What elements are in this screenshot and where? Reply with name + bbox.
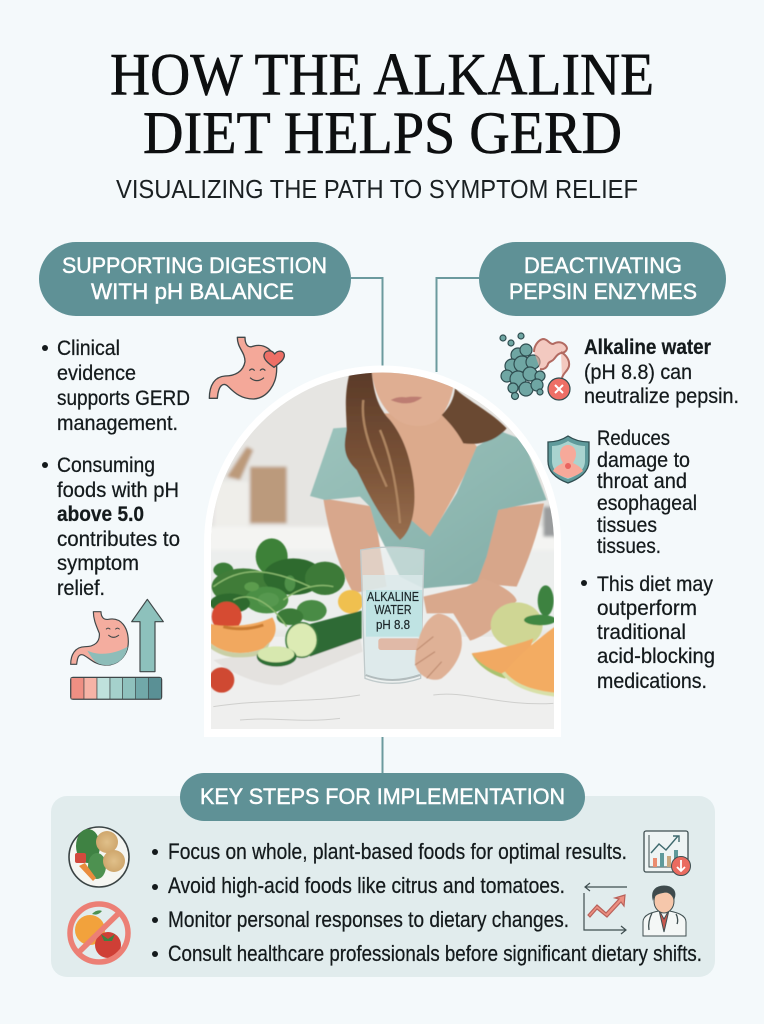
heading: deactivating pepsin — [479, 242, 726, 316]
heading: key steps: KEY STEPS FOR IMPLEMENTATION — [200, 784, 565, 809]
icon: chart with down arrow — [644, 831, 690, 876]
panel: key steps — [51, 796, 715, 977]
vegetables — [209, 538, 363, 693]
icon: stomach with pH arrow and scale — [71, 599, 163, 699]
heading: key steps — [180, 773, 585, 821]
text: alkaline water: neutralize pepsin. — [584, 384, 739, 408]
glass label text — [367, 590, 419, 632]
text: reduces damage: throat and — [597, 469, 687, 493]
left text block: above 5.0 — [57, 502, 144, 526]
glass label text: pH 8.8 — [376, 618, 410, 632]
text: reduces damage: Reduces — [597, 426, 670, 450]
left text block: Consuming — [57, 453, 155, 477]
heading: deactivating pepsin: DEACTIVATING — [524, 253, 682, 278]
left text block: contributes to — [57, 527, 180, 551]
woman — [310, 370, 547, 641]
glass of alkaline water — [361, 547, 424, 683]
text: outperform medications: acid-blocking — [597, 644, 715, 668]
icon: happy stomach with heart — [209, 337, 284, 399]
heading: deactivating pepsin: PEPSIN ENZYMES — [509, 279, 697, 304]
icon: plant food plate — [69, 827, 129, 887]
text: reduces damage: tissues — [597, 513, 657, 537]
heading: supporting digestion: SUPPORTING DIGESTION — [62, 253, 327, 278]
text: alkaline water — [584, 335, 739, 408]
title: DIET HELPS GERD — [143, 100, 622, 166]
title — [110, 42, 654, 166]
hand over glass — [415, 613, 462, 680]
left text block: evidence — [57, 361, 136, 385]
melon and apple right — [472, 585, 556, 697]
left text block: supports GERD — [57, 386, 190, 410]
subtitle: VISUALIZING THE PATH TO SYMPTOM RELIEF — [116, 174, 638, 204]
icon: shield throat — [548, 436, 589, 483]
marble counter — [200, 637, 560, 733]
connector lines — [351, 278, 479, 773]
icon: no acid foods — [70, 904, 128, 962]
left text block: Clinical — [57, 336, 120, 360]
text: outperform medications — [581, 572, 715, 693]
bullet list: key steps: Monitor personal responses to dietary changes. — [168, 907, 569, 932]
text: reduces damage — [597, 426, 697, 558]
central photo — [200, 365, 560, 735]
icon: doctor — [643, 886, 686, 936]
left text block: foods with pH — [57, 478, 179, 502]
glass label text: WATER — [374, 603, 412, 617]
kitchen background — [211, 445, 554, 552]
title: HOW THE ALKALINE — [110, 42, 654, 108]
icon: trend monitor — [584, 883, 627, 934]
bullet list: key steps: Avoid high-acid foods like citrus and tomatoes. — [168, 873, 565, 898]
text: outperform medications: traditional — [597, 620, 686, 644]
left text block: symptom — [57, 551, 139, 575]
glass label text: ALKALINE — [367, 590, 419, 604]
text: reduces damage: damage to — [597, 448, 690, 472]
text: reduces damage: tissues. — [597, 534, 661, 558]
heading: supporting digestion — [39, 242, 351, 316]
text: alkaline water: Alkaline water — [584, 335, 712, 359]
icon: pepsin molecule — [500, 333, 570, 400]
left text block: management. — [57, 411, 178, 435]
bullet list: key steps: Focus on whole, plant-based foods for optimal results. — [168, 839, 627, 864]
left text block: relief. — [57, 576, 105, 600]
text: outperform medications: outperform — [597, 596, 697, 620]
left text block — [42, 336, 190, 600]
arch frame — [204, 366, 561, 737]
text: outperform medications: This diet may — [597, 572, 713, 596]
heading: supporting digestion: WITH pH BALANCE — [91, 279, 294, 304]
text: outperform medications: medications. — [597, 669, 707, 693]
text: alkaline water: (pH 8.8) can — [584, 360, 692, 384]
bullet list: key steps — [152, 839, 702, 966]
text: reduces damage: esophageal — [597, 491, 697, 515]
